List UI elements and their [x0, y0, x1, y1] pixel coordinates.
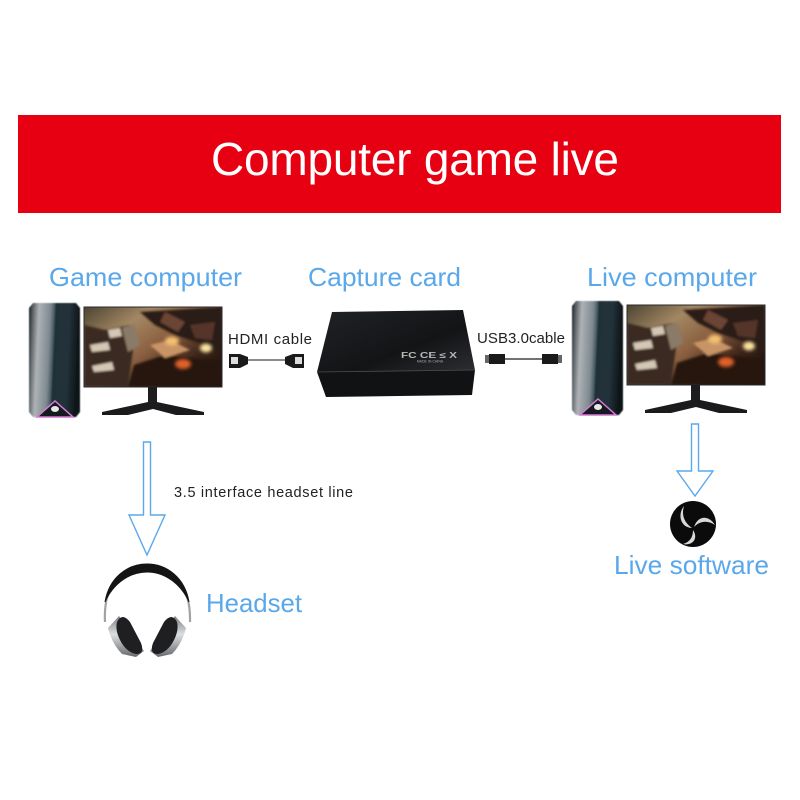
label: live software: Live software [614, 550, 769, 580]
arrow: live computer to software [677, 424, 713, 496]
icon: live software logo [670, 501, 716, 547]
card certification marks: FC CE ≤ X [401, 351, 458, 360]
label: capture card: Capture card [308, 262, 461, 292]
title banner [18, 115, 781, 213]
icon: headset [105, 564, 190, 657]
label: game computer: Game computer [49, 262, 242, 292]
icon: live computer tower and monitor [572, 301, 765, 415]
icon: USB cable [485, 354, 562, 364]
icon: HDMI cable [229, 354, 304, 368]
title: Computer game live [211, 133, 619, 185]
icon: game computer tower and monitor [29, 303, 222, 417]
label: USB3.0 cable: USB3.0cable [477, 330, 565, 347]
label: headset: Headset [206, 588, 303, 618]
label: headset line: 3.5 interface headset line [174, 485, 353, 501]
card origin text: MADE IN CHINA [417, 360, 444, 364]
arrow: game computer to headset [129, 442, 165, 555]
label: HDMI cable: HDMI cable [228, 331, 312, 348]
icon: capture card [317, 310, 475, 397]
label: live computer: Live computer [587, 262, 757, 292]
